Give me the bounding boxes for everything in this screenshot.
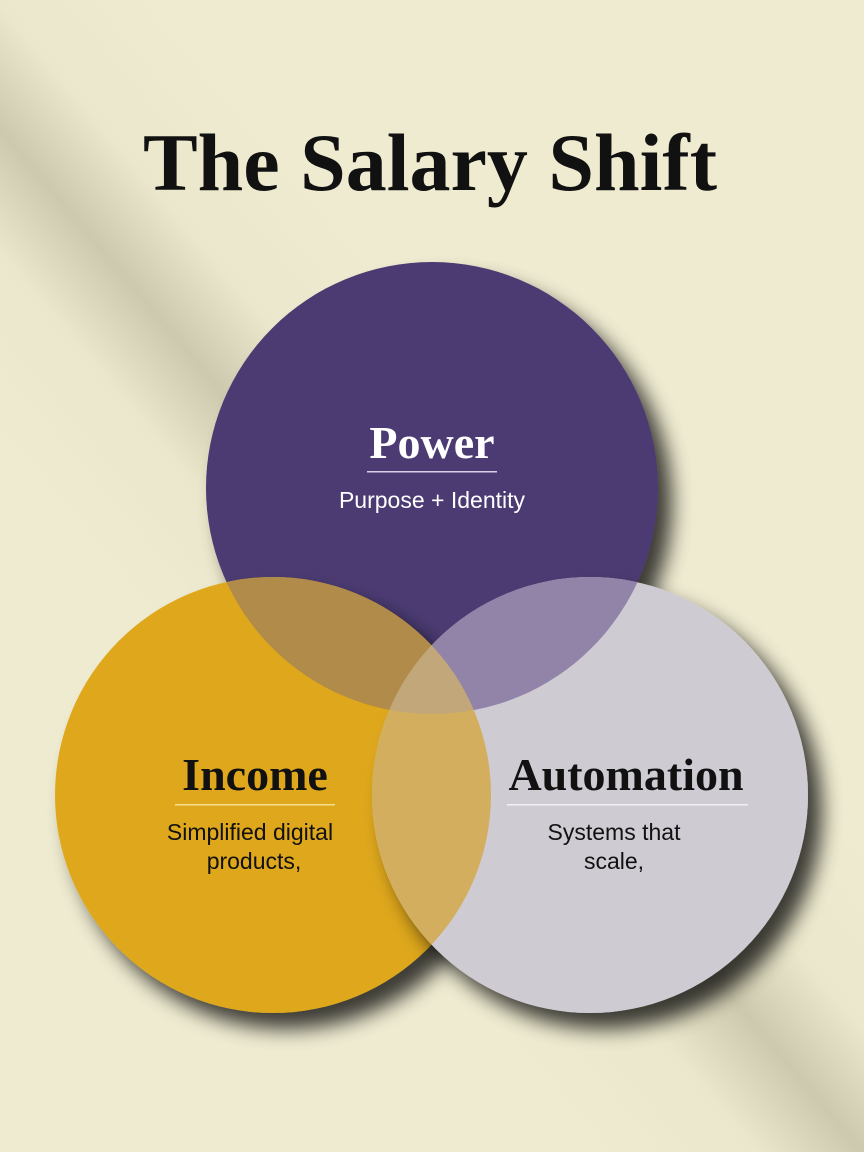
circle: automation — [372, 577, 808, 1013]
circle: power — [206, 262, 658, 714]
overlap: power-automation — [390, 577, 638, 710]
label: income: Simplified digital — [167, 819, 333, 845]
title: The Salary Shift — [143, 117, 717, 208]
label: automation: Automation — [508, 749, 744, 800]
label: power: Purpose + Identity — [339, 487, 526, 513]
label: automation — [507, 749, 748, 874]
overlap: power-income — [226, 577, 432, 710]
label: income — [167, 749, 335, 874]
venn diagram — [55, 262, 808, 1013]
label: income: products, — [207, 848, 301, 874]
label: income: Income — [182, 749, 328, 800]
overlap: center — [390, 646, 474, 714]
label: power — [339, 417, 526, 513]
overlap: income-automation — [372, 646, 491, 944]
label: automation: scale, — [584, 848, 644, 874]
label: power: Power — [369, 417, 495, 468]
circle: income — [55, 577, 491, 1013]
label: automation: Systems that — [548, 819, 681, 845]
